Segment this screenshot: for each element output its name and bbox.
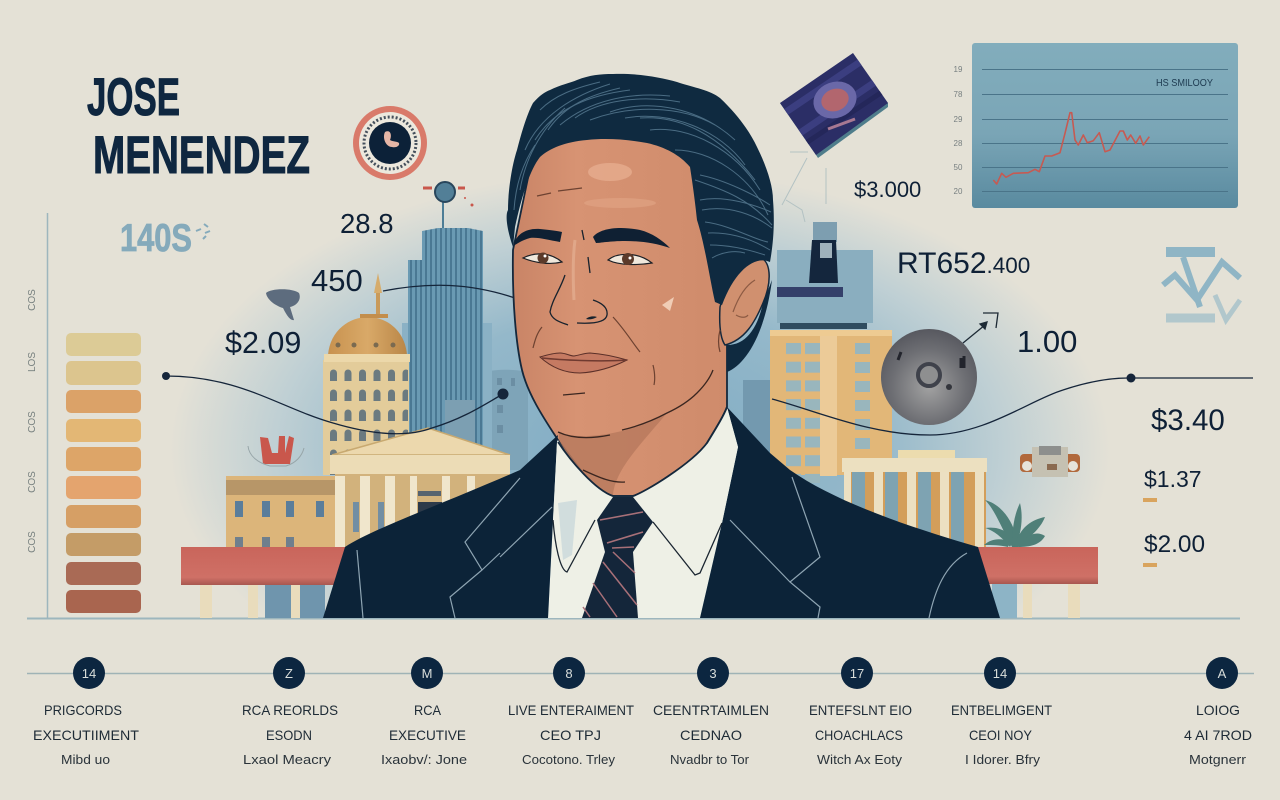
right connector curve <box>772 378 1253 435</box>
timeline node 1: 14 <box>82 666 96 681</box>
left city buildings <box>181 182 528 618</box>
value labels: $2.00 <box>1144 531 1205 558</box>
timeline node 6: CHOACHLACS <box>815 727 903 743</box>
timeline node 3 <box>381 657 467 767</box>
timeline node 7: CEOI NOY <box>969 727 1033 743</box>
chart y labels: 29 <box>954 115 963 124</box>
timeline node 4: Cocotono. Trley <box>522 752 616 767</box>
hair <box>507 74 774 305</box>
value tick marks <box>1143 498 1157 567</box>
colour swatch bar stack <box>66 333 141 613</box>
red awning right <box>975 547 1098 618</box>
timeline node 5: 3 <box>709 666 717 681</box>
chin lines <box>558 370 713 482</box>
chart title: HS SMILOOY <box>1156 78 1213 89</box>
timeline node 7: ENTBELIMGENT <box>951 702 1052 718</box>
axis labels: COS <box>27 471 38 493</box>
eyes <box>523 254 562 263</box>
timeline node 2 <box>242 657 338 767</box>
timeline node 4: LIVE ENTERAIMENT <box>508 702 634 718</box>
chart background <box>972 43 1238 208</box>
cheek creases <box>533 188 720 385</box>
timeline node 5: Nvadbr to Tor <box>670 752 750 767</box>
title <box>87 68 310 185</box>
shirt collar <box>553 407 738 575</box>
palm plant <box>984 500 1045 547</box>
sphere <box>881 329 977 425</box>
forehead highlight <box>588 163 632 181</box>
portrait <box>323 74 1000 618</box>
timeline node 7: I Idorer. Bfry <box>965 752 1041 767</box>
neoclassical temple <box>330 428 510 547</box>
red chair icon <box>248 436 304 466</box>
timeline node 3: M <box>422 666 432 681</box>
title: JOSE <box>87 68 180 127</box>
badge icon <box>353 106 427 180</box>
face and neck <box>513 120 727 496</box>
timeline line <box>27 672 1254 674</box>
right temple <box>842 450 987 547</box>
purple card icon <box>780 53 888 158</box>
hair strands <box>514 82 772 258</box>
timeline node 8: LOIOG <box>1196 702 1240 718</box>
connector dots <box>162 372 1136 400</box>
axis labels <box>27 289 38 553</box>
right city buildings <box>743 222 1098 618</box>
timeline node 5 <box>653 657 769 767</box>
timeline node 7 <box>951 657 1052 767</box>
left connector curve <box>166 376 503 434</box>
chart grid <box>982 70 1228 192</box>
axis labels: COS <box>27 411 38 433</box>
domed tower <box>323 273 410 475</box>
small grey camera icon <box>266 289 300 320</box>
striped tie <box>582 497 653 618</box>
timeline node 6 <box>809 657 912 767</box>
title: MENENDEZ <box>93 126 310 185</box>
timeline node 3: Ixaobv/: Jone <box>381 752 467 767</box>
timeline node 2: ESODN <box>266 727 312 743</box>
blue backdrop glow <box>193 196 1086 618</box>
timeline node 5: CEENTRTAIMLEN <box>653 702 769 718</box>
timeline node 6: 17 <box>850 666 864 681</box>
timeline node 2: Z <box>285 666 293 681</box>
y axis and baseline <box>27 213 1240 618</box>
eyebrows <box>513 229 562 246</box>
axis labels: LOS <box>27 352 38 372</box>
timeline node 8: 4 AI 7ROD <box>1184 727 1252 743</box>
value labels: 450 <box>311 263 363 298</box>
timeline node 1: EXECUTIIMENT <box>33 727 139 743</box>
value labels: $1.37 <box>1144 466 1202 492</box>
chart red line <box>993 113 1149 184</box>
axis labels: COS <box>27 289 38 311</box>
rooftop machine <box>777 222 873 329</box>
skyscraper <box>402 182 492 453</box>
value labels: $2.09 <box>225 326 301 360</box>
faint sketch lines under card <box>782 152 826 222</box>
timeline node 4 <box>508 657 634 767</box>
timeline node 3: EXECUTIVE <box>389 727 466 743</box>
tan tower <box>770 330 892 483</box>
timeline node 8 <box>1184 657 1252 767</box>
timeline node 4: CEO TPJ <box>540 727 601 743</box>
timeline node 4: 8 <box>565 666 573 681</box>
line chart panel <box>954 43 1238 208</box>
chart y labels: 28 <box>954 139 963 148</box>
shirt base <box>548 407 738 618</box>
value labels: $3.40 <box>1151 404 1225 437</box>
upper connector curve <box>383 285 515 298</box>
value labels: $3.000 <box>854 177 921 202</box>
connector curves <box>162 285 1253 435</box>
value labels: 1.00 <box>1017 324 1077 359</box>
neck shadow <box>559 413 667 495</box>
decade label: 140S <box>120 217 192 260</box>
timeline node 2: Lxaol Meacry <box>243 752 332 767</box>
value labels: RT652.400 <box>897 247 1030 280</box>
lips <box>540 353 627 373</box>
ear <box>720 257 769 345</box>
timeline node 1: Mibd uo <box>61 752 110 767</box>
timeline node 5: CEDNAO <box>680 727 742 743</box>
timeline node 8: A <box>1218 666 1227 681</box>
trend logo icon <box>1163 252 1240 320</box>
chart y labels: 50 <box>954 163 963 172</box>
chart y labels: 20 <box>954 187 963 196</box>
chart y labels: 19 <box>954 65 963 74</box>
timeline node 3: RCA <box>414 702 442 718</box>
timeline node 8: Motgnerr <box>1189 752 1247 767</box>
arrow from sphere <box>963 313 998 343</box>
timeline node 6: ENTEFSLNT EIO <box>809 702 912 718</box>
timeline node 6: Witch Ax Eoty <box>817 752 903 767</box>
timeline node 7: 14 <box>993 666 1007 681</box>
value labels <box>225 177 1225 558</box>
navy jacket <box>323 407 1000 618</box>
background block <box>743 380 775 455</box>
timeline node 1: PRIGCORDS <box>44 702 122 718</box>
career timeline <box>27 657 1254 767</box>
timeline node 1 <box>33 657 139 767</box>
timeline node 2: RCA REORLDS <box>242 702 338 718</box>
chart y labels: 78 <box>954 90 963 99</box>
value labels: 28.8 <box>340 208 394 239</box>
left low building <box>226 476 336 547</box>
chart y labels <box>954 65 963 196</box>
axis labels: COS <box>27 531 38 553</box>
red awning left <box>181 547 351 618</box>
speaker gadget <box>1020 446 1080 477</box>
background block <box>483 370 528 470</box>
nose <box>550 230 607 325</box>
